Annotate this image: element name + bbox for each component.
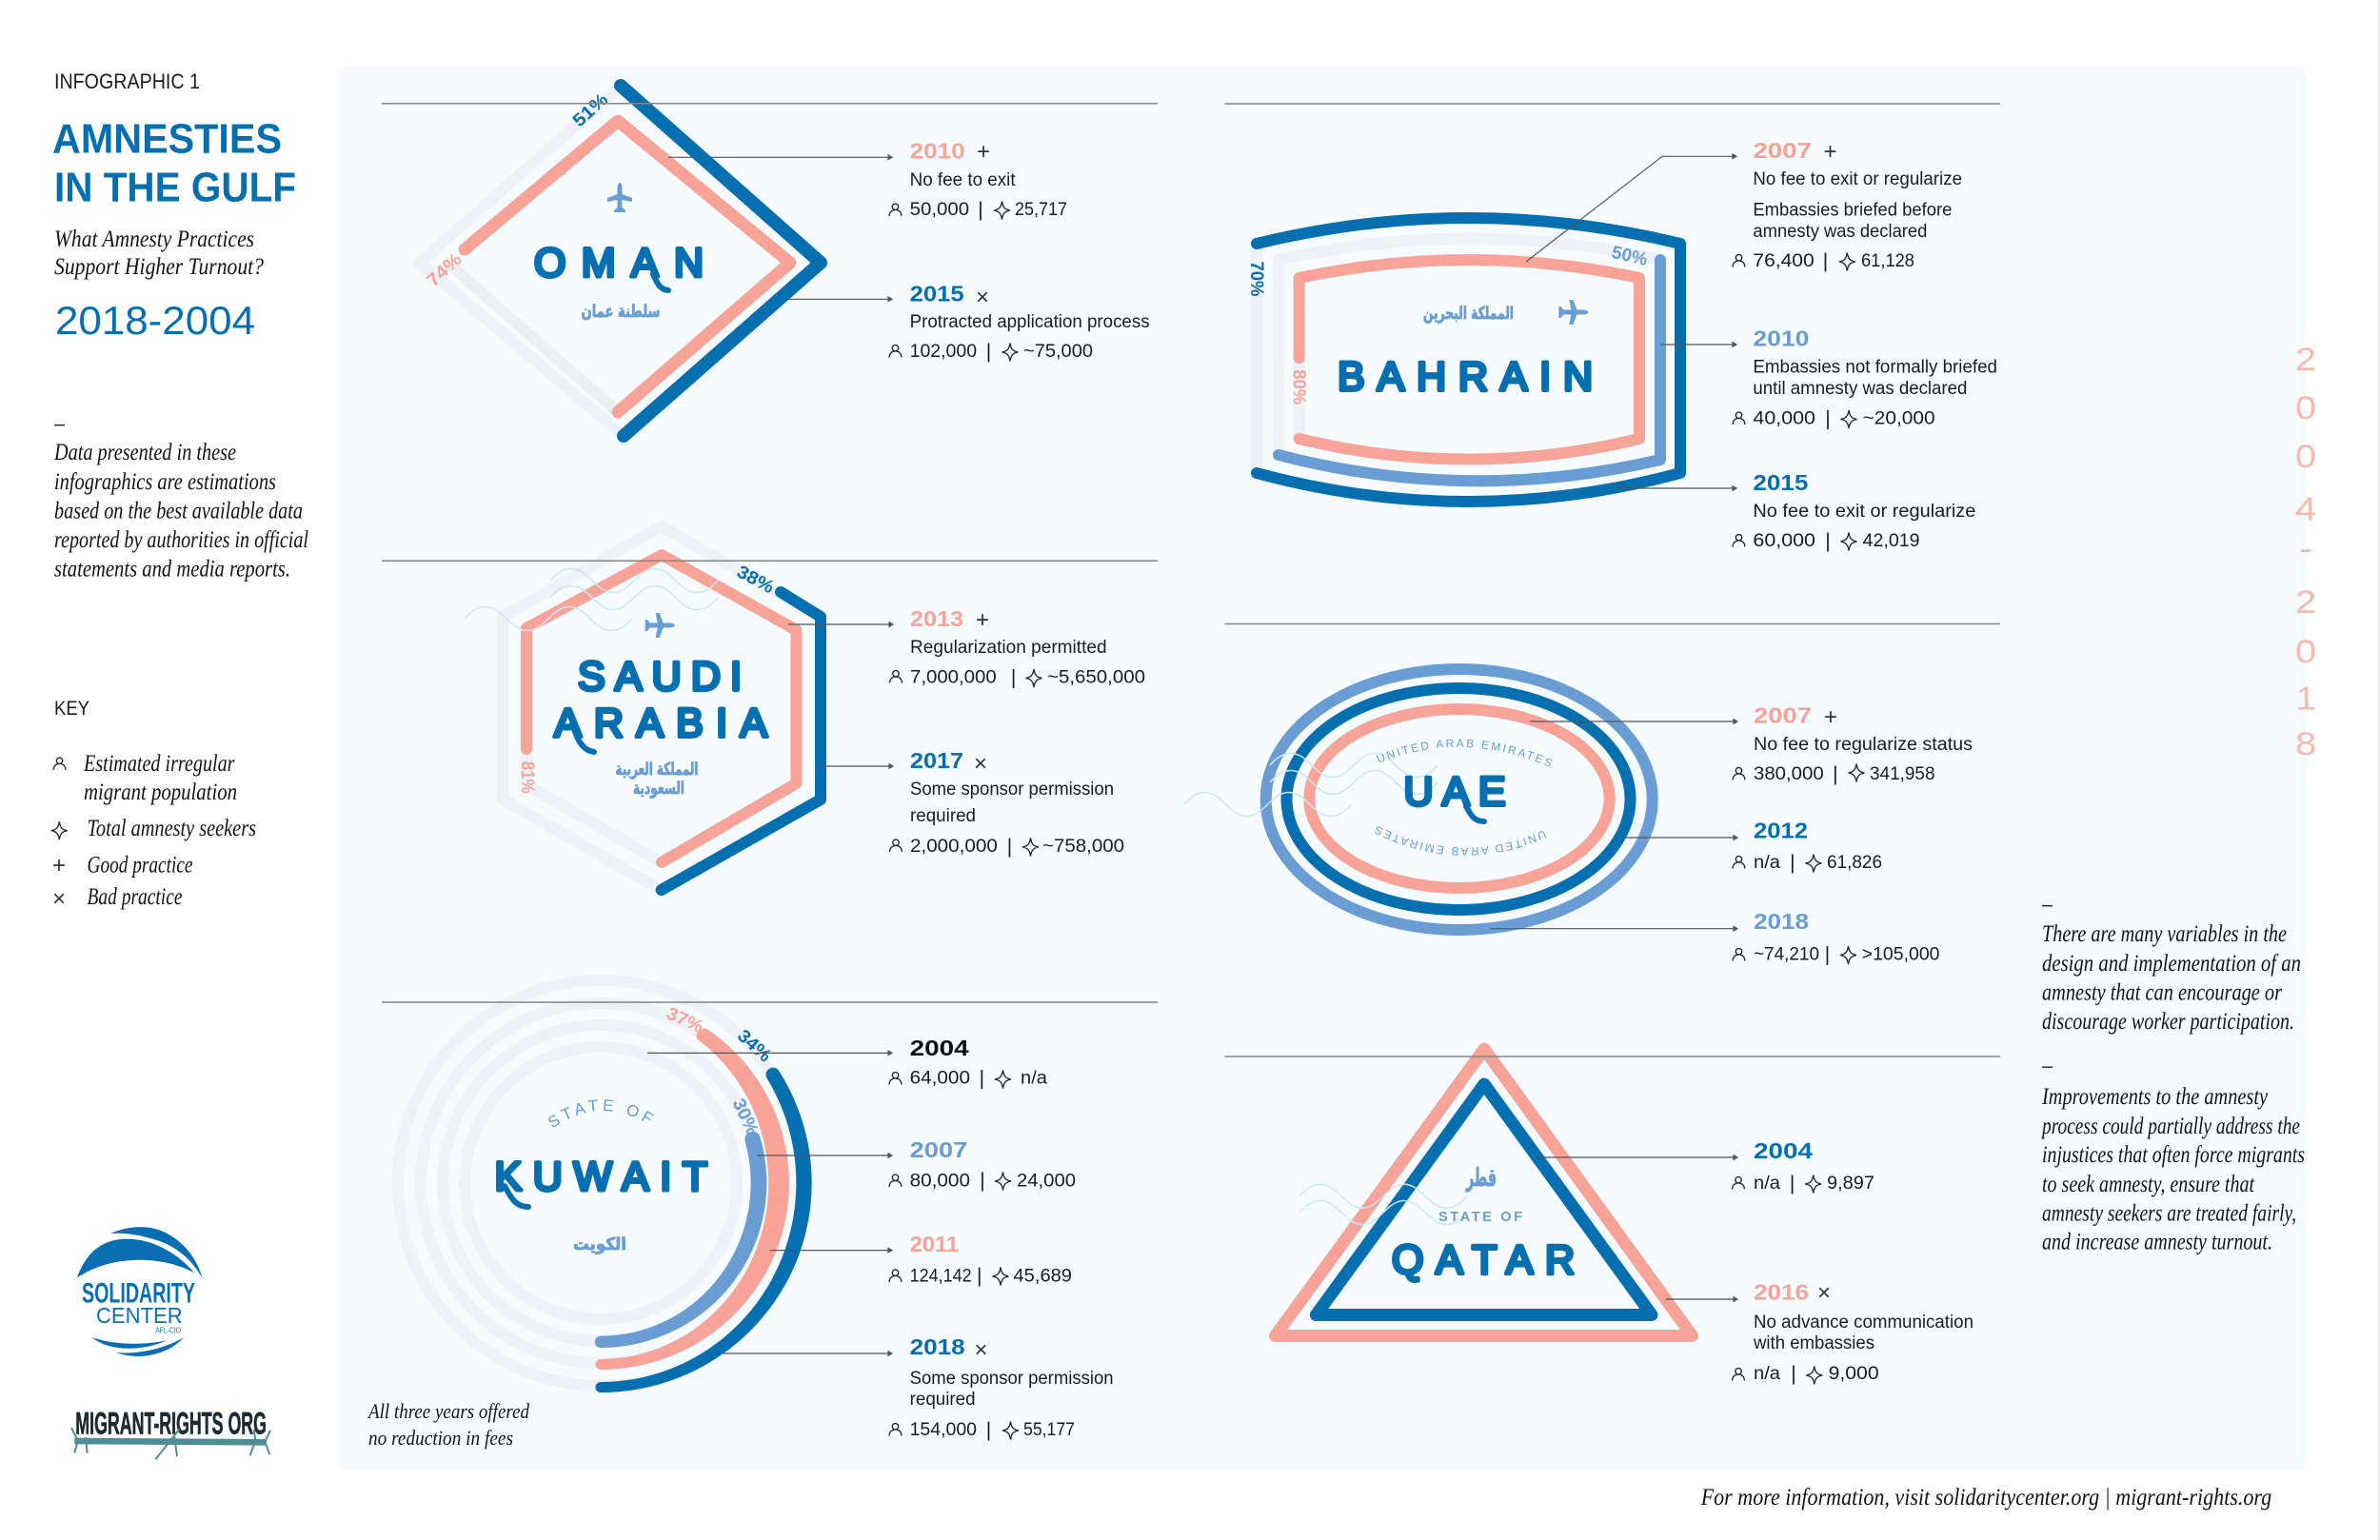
text block: variables note: There are many variables in the [2042, 921, 2287, 947]
percentage 37%: 37% [664, 1004, 706, 1037]
logo: Migrant-Rights.org: MIGRANT-RIGHTS ORG [75, 1407, 267, 1441]
entry: 2017: × [974, 751, 987, 777]
percentage 30%: 30% [728, 1096, 763, 1138]
sidebar: title block [52, 69, 296, 343]
percentage 70%: 70% [1246, 261, 1266, 297]
country name: UAE [1403, 769, 1506, 815]
arabic name: قطر [1465, 1164, 1497, 1193]
sidebar: data note: reported by authorities in official [54, 527, 308, 553]
arabic name: السعودية [633, 779, 684, 799]
text block: variables note: design and implementation of an [2042, 951, 2301, 977]
ring chart [398, 980, 812, 1392]
entry: 2016: No advance communication [1754, 1313, 1973, 1333]
entry: 2004: 2004 [1754, 1138, 1813, 1163]
entry: 2010: 40,000 [1753, 409, 1815, 429]
entry: 2017: required [910, 806, 976, 826]
vertical date range: 0 [2295, 634, 2316, 670]
entry: 2011: 45,689 [1013, 1266, 1072, 1286]
entry: 2018: × [974, 1337, 988, 1363]
country name: BAHRAIN [1338, 354, 1593, 400]
rule: Qatar [1224, 1056, 2000, 1057]
subtitle: What Amnesty Practices [54, 227, 254, 252]
entry: 2015: 2015 [910, 282, 964, 306]
sidebar: data note: Data presented in these [53, 440, 236, 465]
logo: Solidarity Center: CENTER [96, 1303, 183, 1328]
arc label: top: UNITED ARAB EMIRATES [1377, 739, 1552, 767]
entry: 2015: | [1825, 530, 1831, 552]
percentage 38%: 38% [733, 562, 777, 598]
legend item: good practice: + [52, 853, 66, 879]
legend item: good practice [52, 853, 192, 879]
entry: 2007: | [1833, 763, 1838, 785]
legend item: irregular migrant population [53, 751, 237, 805]
vertical date range: 2 [2295, 584, 2316, 621]
entry: 2007: No fee to exit or regularize [1753, 169, 1962, 189]
diamond chart [420, 86, 821, 436]
entry: 2007: 380,000 [1754, 764, 1824, 784]
entry: 2013: 2013 [910, 606, 963, 631]
legend item: irregular migrant population: migrant population [84, 780, 237, 805]
vertical date range: 1 [2295, 681, 2316, 718]
percentage 81%: 81% [517, 761, 537, 794]
entry: 2007: amnesty was declared [1753, 222, 1927, 242]
vertical date range: 0 [2295, 439, 2316, 475]
text block: variables note: amnesty that can encourage or [2042, 980, 2282, 1005]
icon: plane [607, 183, 632, 212]
entry: 2015: No fee to exit or regularize [1753, 502, 1975, 522]
legend: key [51, 698, 256, 912]
panel: Bahrain [1246, 138, 1997, 552]
text block: improvements note [2040, 1066, 2305, 1254]
percentage 80%: 80% [1289, 369, 1309, 405]
logo: Solidarity Center: SOLIDARITY [82, 1277, 195, 1309]
entry: 2018: ~74,210 [1754, 945, 1819, 965]
entry: 2018: 2018 [1754, 909, 1809, 934]
vertical date range [2294, 342, 2317, 762]
entry: 2013 [788, 606, 1145, 689]
country name: OMAN [534, 240, 704, 286]
entry: 2018: 55,177 [1023, 1420, 1075, 1440]
text block: improvements note: to seek amnesty, ensure that [2042, 1172, 2255, 1197]
entry: 2018: required [910, 1390, 976, 1410]
text block: variables note [2042, 905, 2301, 1035]
entry: 2004: 64,000 [910, 1069, 970, 1089]
entry: 2007: + [1823, 139, 1837, 165]
entry: 2004 [1537, 1138, 1874, 1194]
entry: 2017: 2,000,000 [910, 837, 998, 857]
country name: KUWAIT [495, 1154, 707, 1199]
triangle chart [1276, 1049, 1693, 1336]
barrel chart [1257, 218, 1680, 502]
entry: 2018: | [986, 1419, 991, 1441]
entry: 2010: + [977, 139, 990, 165]
rule: Oman [382, 103, 1158, 105]
entry: 2015: Protracted application process [910, 312, 1150, 332]
icon: plane [1558, 300, 1588, 325]
entry: 2004 [647, 1036, 1047, 1089]
entry: 2017: 2017 [910, 748, 963, 773]
entry: 2013: | [1011, 666, 1016, 689]
label: infographic number: INFOGRAPHIC 1 [54, 69, 200, 93]
entry: 2016: n/a [1754, 1364, 1780, 1384]
entry: 2015 [1618, 470, 1975, 552]
sidebar: data note: statements and media reports. [54, 556, 290, 582]
rule: Bahrain [1224, 103, 2000, 105]
entry: 2015: × [976, 285, 989, 310]
entry: 2007: 76,400 [1753, 251, 1815, 271]
vertical date range: 8 [2295, 726, 2316, 762]
panel: Qatar [1276, 1049, 1973, 1385]
percentage 74%: 74% [423, 249, 466, 291]
entry: 2018: >105,000 [1862, 945, 1940, 965]
entry: 2010: until amnesty was declared [1753, 379, 1967, 399]
panel: Kuwait [367, 975, 1114, 1450]
entry: 2011: 2011 [910, 1232, 959, 1256]
vertical date range: - [2299, 531, 2312, 567]
legend item: bad practice [52, 884, 183, 912]
country name [554, 654, 767, 752]
arabic name: سلطنة عمان [581, 302, 661, 322]
entry: 2004: 2004 [910, 1036, 969, 1060]
ellipse chart [1266, 669, 1653, 930]
note: no reduction in fees [367, 1399, 530, 1450]
country name: QATAR [1392, 1237, 1575, 1283]
rule: UAE [1224, 622, 2000, 624]
text block: improvements note: amnesty seekers are treated fairly, [2042, 1201, 2296, 1227]
title: IN THE GULF [54, 164, 296, 211]
vertical date range: 0 [2295, 390, 2316, 426]
entry: 2007: 341,958 [1870, 764, 1934, 784]
entry: 2013: 7,000,000 [910, 668, 997, 688]
legend item: bad practice: × [52, 886, 66, 912]
entry: 2004: n/a [1754, 1174, 1780, 1194]
entry: 2018 [724, 1334, 1114, 1441]
entry: 2010: | [978, 199, 983, 221]
hexagon chart [503, 526, 821, 890]
country name: ARABIA [554, 701, 767, 746]
entry: 2007 [758, 1137, 1076, 1192]
sidebar: data note: based on the best available data [54, 499, 303, 523]
text block: improvements note: process could partially address the [2040, 1114, 2300, 1139]
entry: 2016: × [1817, 1280, 1831, 1306]
entry: 2016: 2016 [1754, 1280, 1809, 1305]
entry: 2010: | [1825, 407, 1831, 430]
label: state of: STATE OF [1438, 1210, 1522, 1225]
entry: 2007: + [1824, 704, 1837, 730]
subtitle [54, 227, 264, 280]
logo: Migrant-Rights.org [71, 1407, 270, 1459]
arabic name [615, 760, 699, 799]
entry: 2016: 9,000 [1829, 1364, 1879, 1384]
arc label: state of: STATE OF [548, 1099, 654, 1127]
legend item: total amnesty seekers: Total amnesty seekers [88, 816, 256, 841]
decorative waves [1184, 754, 1438, 817]
entry: 2011 [770, 1232, 1072, 1287]
text block: improvements note: and increase amnesty turnout. [2042, 1230, 2272, 1254]
entry: 2004: n/a [1021, 1069, 1047, 1089]
legend item: good practice: Good practice [88, 853, 192, 879]
entry: 2010: 25,717 [1015, 200, 1067, 220]
entry: 2012: n/a [1754, 853, 1780, 873]
entry: 2010 [668, 139, 1067, 221]
entry: 2012: 61,826 [1827, 853, 1882, 873]
arc label: bottom: UNITED ARAB EMIRATES [1375, 826, 1546, 856]
decorative waves [465, 569, 718, 630]
entry: 2010: ~20,000 [1863, 409, 1935, 429]
entry: 2013: ~5,650,000 [1047, 668, 1145, 688]
percentage 50%: 50% [1610, 243, 1650, 270]
text block: improvements note: Improvements to the amnesty [2041, 1084, 2269, 1110]
entry: 2007: 61,128 [1861, 251, 1914, 271]
entry: 2007: | [1823, 250, 1828, 272]
rule: Kuwait [382, 1001, 1158, 1003]
entry: 2015: 102,000 [910, 342, 977, 362]
entry: 2013: + [976, 607, 989, 633]
entry: 2011: | [977, 1265, 982, 1287]
entry: 2007: No fee to regularize status [1754, 735, 1973, 755]
sidebar: data note [53, 424, 308, 582]
entry: 2015: 60,000 [1753, 531, 1815, 551]
entry: 2007: | [980, 1170, 985, 1192]
entry: 2007: 2007 [910, 1137, 967, 1162]
note: no reduction in fees: no reduction in fees [368, 1426, 513, 1450]
subtitle: Support Higher Turnout? [54, 254, 264, 280]
entry: 2007: 24,000 [1017, 1171, 1076, 1191]
legend item: total amnesty seekers [51, 816, 256, 841]
entry: 2010: Embassies not formally briefed [1753, 358, 1997, 378]
entry: 2017 [819, 748, 1124, 858]
entry: 2010 [1660, 326, 1997, 430]
footer: more information: For more information, visit solidaritycenter.org | migrant-rights.org [1700, 1485, 2271, 1510]
entry: 2012 [1621, 819, 1882, 874]
entry: 2015: | [986, 341, 991, 363]
icon: plane [645, 613, 675, 638]
rule: Saudi Arabia [382, 560, 1158, 562]
entry: 2018: 2018 [910, 1334, 965, 1359]
vertical date range: 2 [2295, 342, 2316, 378]
entry: 2010: No fee to exit [910, 170, 1016, 190]
entry: 2007 [1530, 702, 1973, 785]
entry: 2018: 154,000 [910, 1420, 977, 1440]
entry: 2010: 2010 [910, 139, 965, 164]
entry: 2007: 80,000 [910, 1171, 970, 1191]
entry: 2013: Regularization permitted [910, 638, 1107, 658]
title [52, 116, 296, 211]
entry: 2007 [1526, 138, 1962, 272]
entry: 2017: | [1007, 836, 1012, 858]
percentage 34%: 34% [733, 1026, 775, 1066]
entry: 2012: 2012 [1754, 819, 1808, 843]
panel: Saudi Arabia [465, 526, 1145, 890]
entry: 2017: Some sponsor permission [910, 780, 1114, 800]
panel: Oman [420, 86, 1150, 436]
entry: 2018: Some sponsor permission [910, 1369, 1114, 1389]
panel: UAE [1183, 663, 1973, 965]
arabic name: المملكة العربية [615, 760, 699, 780]
legend item: irregular migrant population: Estimated irregular [83, 751, 235, 777]
background panel [339, 67, 2306, 1470]
entry: 2010: 50,000 [910, 200, 969, 220]
entry: 2011: 124,142 [910, 1266, 972, 1286]
entry: 2007: Embassies briefed before [1753, 201, 1952, 221]
entry: 2016 [1666, 1280, 1973, 1385]
text block: variables note: discourage worker participation. [2042, 1009, 2294, 1035]
entry: 2004: 9,897 [1827, 1174, 1874, 1194]
entry: 2004: | [1790, 1173, 1795, 1194]
arabic name: الكويت [573, 1234, 626, 1254]
entry: 2007: 2007 [1753, 138, 1812, 163]
sidebar: data note: infographics are estimations [54, 469, 276, 495]
arabic name: المملكة البحرين [1423, 304, 1514, 324]
entry: 2015: 2015 [1753, 470, 1809, 495]
note: no reduction in fees: All three years offered [367, 1399, 530, 1423]
title: AMNESTIES [52, 116, 282, 162]
logo: Solidarity Center [77, 1227, 203, 1356]
vertical date range: 4 [2294, 491, 2317, 527]
legend heading: KEY [54, 698, 89, 720]
legend item: bad practice: Bad practice [88, 884, 183, 910]
text block: improvements note: injustices that often force migrants [2042, 1142, 2305, 1168]
country name: SAUDI [578, 654, 742, 700]
logo: Solidarity Center: AFL-CIO [155, 1326, 181, 1335]
entry: 2016: | [1791, 1363, 1796, 1385]
entry: 2016: with embassies [1753, 1333, 1874, 1353]
entry: 2012: | [1790, 852, 1795, 874]
entry: 2015: ~75,000 [1023, 342, 1093, 362]
percentage 51%: 51% [569, 89, 612, 131]
entry: 2010: 2010 [1753, 326, 1809, 350]
entry: 2015 [788, 282, 1150, 363]
decorative waves [1299, 1184, 1467, 1224]
entry: 2015: 42,019 [1863, 531, 1920, 551]
entry: 2017: ~758,000 [1042, 837, 1124, 857]
entry: 2004: | [980, 1068, 984, 1089]
entry: 2018 [1491, 909, 1940, 965]
date range: 2018-2004 [55, 298, 255, 343]
entry: 2018: | [1825, 944, 1830, 965]
entry: 2007: 2007 [1754, 702, 1812, 727]
